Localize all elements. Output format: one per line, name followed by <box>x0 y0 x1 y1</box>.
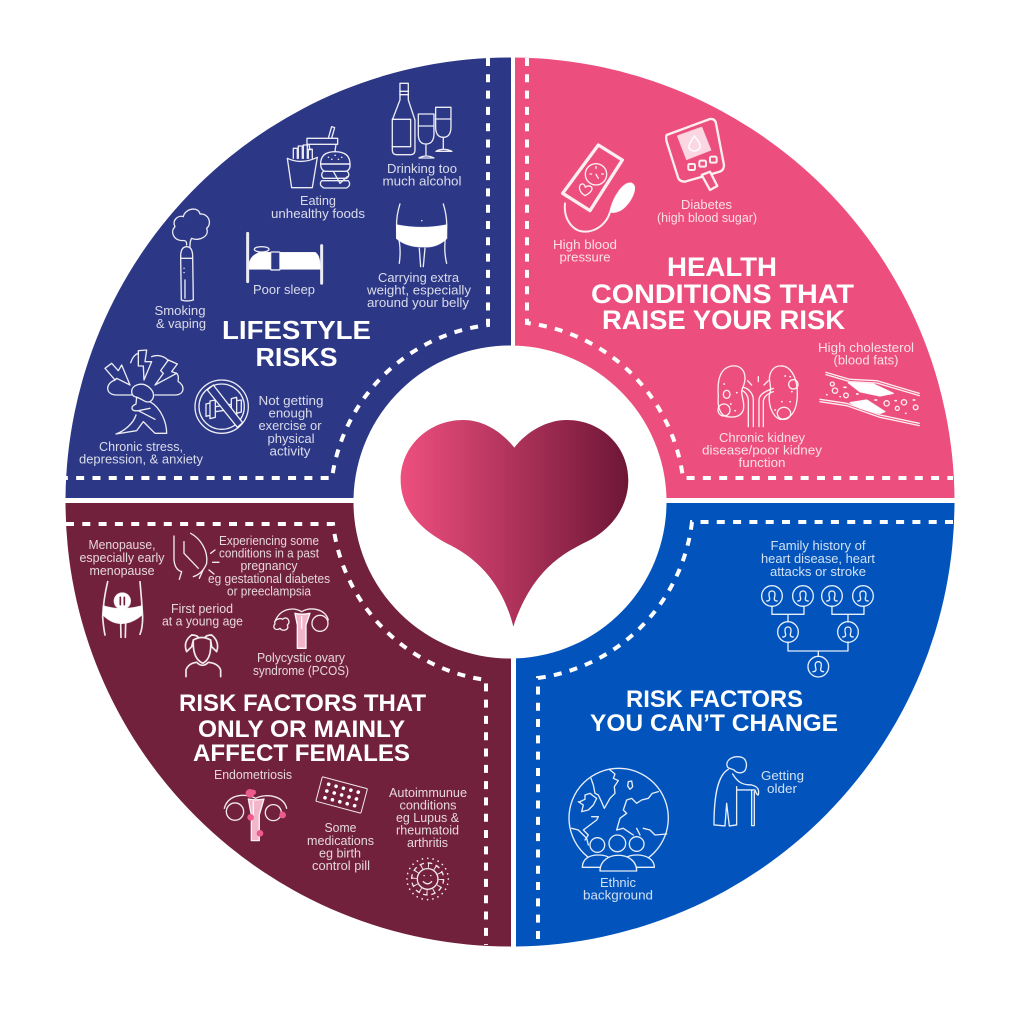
heading: lifestyle risks <box>222 315 371 372</box>
label: autoimmune conditions: arthritis <box>407 835 448 850</box>
label: family history <box>761 538 875 579</box>
label: menopause: Menopause, <box>88 537 156 552</box>
label: past pregnancy conditions: eg gestational diabetes <box>208 571 330 586</box>
heading: health conditions that raise your risk: RAISE YOUR RISK <box>602 305 846 335</box>
label: family history: Family history of <box>770 538 866 553</box>
quadrant: unchangeable risks background <box>516 503 954 946</box>
panel: risk factors you cannot change <box>516 503 954 946</box>
label: family history: heart disease, heart <box>761 551 875 566</box>
label: diabetes: Diabetes <box>681 197 732 212</box>
icon: older person with cane <box>714 757 759 826</box>
label: not getting enough exercise: activity <box>270 444 311 458</box>
icon: family tree <box>762 586 873 677</box>
label: family history: attacks or stroke <box>770 564 866 579</box>
icon: kidneys <box>718 366 798 427</box>
heading: risk factors you cannot change: YOU CAN’T CHANGE <box>590 710 838 737</box>
icon: polycystic ovary <box>274 609 328 648</box>
label: autoimmune conditions: conditions <box>400 798 457 812</box>
label: high cholesterol: (blood fats) <box>834 352 898 368</box>
label: past pregnancy conditions: conditions in a past <box>219 546 319 560</box>
label: ethnic background: background <box>583 888 653 902</box>
label: not getting enough exercise: enough <box>268 406 312 420</box>
icon: stressed person under storm cloud <box>105 350 183 434</box>
label: chronic stress: Chronic stress, <box>99 439 183 454</box>
label: menopause: menopause <box>90 563 154 578</box>
heading: health conditions that raise your risk: CONDITIONS THAT <box>591 279 855 309</box>
label: smoking and vaping <box>154 303 206 331</box>
heading: risk factors that only or mainly affect females <box>179 690 426 767</box>
heading: health conditions that raise your risk <box>591 252 855 335</box>
icon: central heart <box>401 420 628 627</box>
label: smoking and vaping: & vaping <box>156 316 206 331</box>
label: high blood pressure: High blood <box>553 237 617 252</box>
icon: belly <box>397 204 447 267</box>
label: autoimmune conditions: eg Lupus & <box>396 810 459 825</box>
label: high blood pressure: pressure <box>560 250 610 264</box>
label: autoimmune conditions <box>389 785 467 850</box>
quadrant: lifestyle background <box>66 57 511 498</box>
label: high cholesterol <box>818 340 914 368</box>
quadrant: female risk background <box>66 503 511 947</box>
label: eating unhealthy foods <box>271 193 366 221</box>
heading: risk factors you cannot change <box>590 686 838 737</box>
label: chronic kidney disease: disease/poor kidney <box>702 442 823 458</box>
icon: pill blister pack <box>316 777 367 813</box>
label: poor sleep: Poor sleep <box>253 282 315 297</box>
label: not getting enough exercise: physical <box>268 431 315 446</box>
label: chronic stress: depression, & anxiety <box>79 452 203 466</box>
icon: blood pressure monitor <box>563 145 634 232</box>
heading: risk factors you cannot change: RISK FACTORS <box>626 686 803 713</box>
quadrant: health conditions background <box>515 58 954 498</box>
icon: menopause belly <box>103 582 143 637</box>
label: endometriosis: Endometriosis <box>214 767 292 782</box>
label: smoking and vaping: Smoking <box>154 303 206 318</box>
label: some medications: eg birth <box>319 846 361 860</box>
label: autoimmune conditions: rheumatoid <box>396 822 459 838</box>
icon: fast food <box>287 127 350 188</box>
icon: bottle and wine glasses <box>392 83 452 158</box>
label: high cholesterol: High cholesterol <box>818 340 914 355</box>
heading: risk factors that only or mainly affect females: RISK FACTORS THAT <box>179 690 426 717</box>
label: eating unhealthy foods: Eating <box>300 193 336 208</box>
label: drinking too much alcohol <box>382 161 462 188</box>
icon: virus cell <box>407 858 448 900</box>
label: not getting enough exercise: exercise or <box>258 418 322 433</box>
label: diabetes: (high blood sugar) <box>657 210 757 225</box>
label: some medications: Some <box>324 820 356 835</box>
label: carrying extra weight: weight, especially <box>366 282 472 298</box>
label: chronic kidney disease: function <box>738 455 786 470</box>
icon: endometriosis uterus <box>224 789 287 841</box>
label: carrying extra weight: around your belly <box>367 295 470 310</box>
icon: artery with plaque <box>820 372 919 426</box>
label: drinking too much alcohol: Drinking too <box>387 161 457 176</box>
label: chronic kidney disease: Chronic kidney <box>719 430 805 445</box>
label: pcos <box>253 650 349 678</box>
label: menopause: especially early <box>80 550 165 565</box>
label: getting older: older <box>767 781 798 796</box>
label: high blood pressure <box>553 237 617 264</box>
label: pcos: Polycystic ovary <box>257 650 345 665</box>
label: chronic stress <box>79 439 203 466</box>
label: some medications <box>307 820 374 873</box>
panel: lifestyle risks <box>66 57 511 498</box>
label: first period: First period <box>171 601 233 616</box>
label: getting older <box>761 768 804 796</box>
panel: health conditions <box>515 58 954 498</box>
label: diabetes <box>657 197 757 225</box>
label: ethnic background: Ethnic <box>600 875 636 890</box>
icon: vape with smoke cloud <box>173 209 209 301</box>
label: drinking too much alcohol: much alcohol <box>382 174 462 188</box>
label: past pregnancy conditions: pregnancy <box>240 558 298 573</box>
heading: lifestyle risks: LIFESTYLE <box>222 315 371 345</box>
icon: glucose meter <box>666 119 724 190</box>
heading: health conditions that raise your risk: HEALTH <box>667 252 777 282</box>
label: carrying extra weight <box>366 270 472 310</box>
label: ethnic background <box>583 875 653 902</box>
heading: risk factors that only or mainly affect females: AFFECT FEMALES <box>193 740 410 767</box>
label: past pregnancy conditions: or preeclampsia <box>227 584 312 598</box>
heading: risk factors that only or mainly affect females: ONLY OR MAINLY <box>198 716 405 743</box>
label: some medications: medications <box>307 833 374 848</box>
heading: lifestyle risks: RISKS <box>256 342 338 372</box>
label: first period: at a young age <box>162 614 243 628</box>
label: menopause <box>80 537 165 578</box>
label: first period <box>162 601 243 628</box>
icon: globe with people <box>569 768 668 871</box>
label: not getting enough exercise <box>258 393 324 458</box>
label: chronic kidney disease <box>702 430 823 470</box>
label: past pregnancy conditions <box>208 533 330 598</box>
panel: female risk factors <box>66 503 511 947</box>
label: not getting enough exercise: Not getting <box>258 393 324 408</box>
label: some medications: control pill <box>312 858 370 873</box>
label: getting older: Getting <box>761 768 804 783</box>
label: autoimmune conditions: Autoimmunue <box>389 785 467 800</box>
label: past pregnancy conditions: Experiencing some <box>219 533 319 548</box>
icon: pregnant belly <box>174 533 219 579</box>
icon: bed <box>248 233 322 283</box>
icon: no exercise sign <box>195 380 248 433</box>
label: pcos: syndrome (PCOS) <box>253 663 349 678</box>
label: carrying extra weight: Carrying extra <box>378 270 460 285</box>
label: eating unhealthy foods: unhealthy foods <box>271 206 366 221</box>
icon: young girl <box>185 635 221 677</box>
